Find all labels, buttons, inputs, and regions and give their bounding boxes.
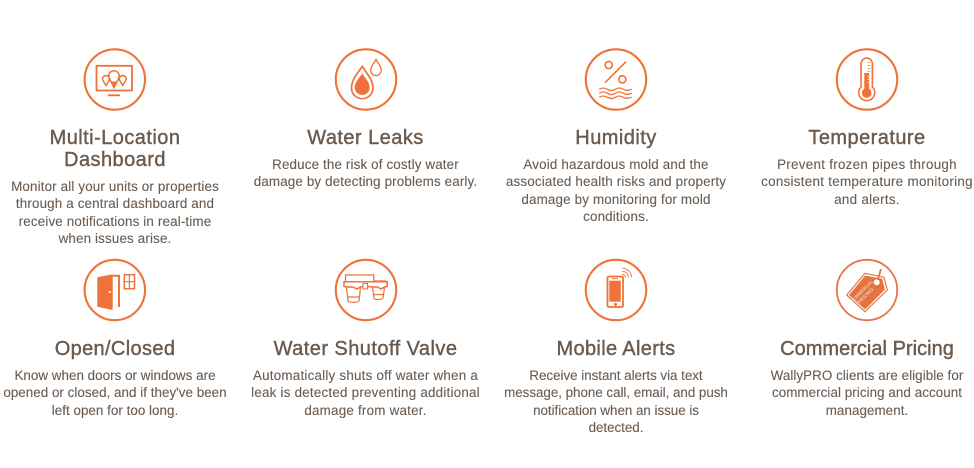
icon: price tag bbox=[836, 258, 898, 322]
description: leak is detected preventing additional bbox=[251, 385, 480, 400]
icon: door and window bbox=[84, 258, 146, 322]
icon: shutoff valve bbox=[334, 258, 398, 322]
description: commercial pricing and account bbox=[772, 385, 962, 400]
description: Automatically shuts off water when a bbox=[253, 368, 478, 383]
icon: price tag: PRICING bbox=[857, 287, 875, 305]
description: conditions. bbox=[583, 209, 649, 224]
icon: percent and waves bbox=[584, 48, 648, 111]
description: management. bbox=[826, 403, 908, 418]
heading: Mobile Alerts bbox=[556, 338, 676, 360]
heading: Water Shutoff Valve bbox=[274, 338, 457, 360]
description: damage from water. bbox=[304, 403, 427, 418]
description bbox=[251, 368, 480, 418]
description: damage by monitoring for mold bbox=[521, 192, 711, 207]
icon: price tag: COMMERCIAL bbox=[850, 279, 874, 303]
icon: smartphone with signal bbox=[584, 258, 648, 322]
description: through a central dashboard and bbox=[16, 196, 214, 211]
description bbox=[254, 157, 477, 189]
icon: water drops bbox=[334, 48, 398, 111]
card: Water Leaks bbox=[254, 48, 477, 189]
description bbox=[11, 179, 219, 246]
card: Open/Closed bbox=[3, 258, 227, 418]
description: Know when doors or windows are bbox=[14, 368, 216, 383]
heading: Humidity bbox=[575, 127, 657, 149]
description bbox=[504, 368, 728, 435]
card: Mobile Alerts bbox=[504, 258, 728, 435]
heading: Open/Closed bbox=[55, 338, 175, 360]
description: Reduce the risk of costly water bbox=[272, 157, 459, 172]
card: Temperature bbox=[761, 48, 973, 207]
icon: thermometer bbox=[836, 48, 898, 111]
heading: Temperature bbox=[808, 127, 926, 149]
description: consistent temperature monitoring bbox=[761, 174, 973, 189]
heading: Water Leaks bbox=[307, 127, 424, 149]
description: associated health risks and property bbox=[506, 174, 726, 189]
description: Monitor all your units or properties bbox=[11, 179, 219, 194]
description bbox=[761, 157, 973, 207]
description bbox=[3, 368, 227, 418]
description: damage by detecting problems early. bbox=[254, 174, 477, 189]
description: left open for too long. bbox=[52, 403, 178, 418]
description: detected. bbox=[589, 420, 643, 435]
card: Multi-Location Dashboard bbox=[11, 48, 219, 246]
card: Humidity bbox=[506, 48, 726, 224]
description: and alerts. bbox=[834, 192, 900, 207]
heading bbox=[50, 127, 180, 171]
description: Receive instant alerts via text bbox=[529, 368, 703, 383]
description: when issues arise. bbox=[59, 231, 171, 246]
description bbox=[770, 368, 964, 418]
icon: monitor with location pins bbox=[84, 48, 146, 111]
card: Water Shutoff Valve bbox=[251, 258, 480, 418]
heading: Multi-Location bbox=[50, 127, 180, 149]
description: message, phone call, email, and push bbox=[504, 385, 728, 400]
description: opened or closed, and if they've been bbox=[3, 385, 227, 400]
heading: Commercial Pricing bbox=[780, 338, 954, 360]
heading: Dashboard bbox=[64, 149, 166, 171]
description bbox=[506, 157, 726, 224]
description: Prevent frozen pipes through bbox=[777, 157, 957, 172]
description: Avoid hazardous mold and the bbox=[523, 157, 709, 172]
description: receive notifications in real-time bbox=[19, 214, 211, 229]
description: notification when an issue is bbox=[533, 403, 699, 418]
card: Commercial Pricing bbox=[770, 258, 964, 418]
description: WallyPRO clients are eligible for bbox=[771, 368, 963, 383]
